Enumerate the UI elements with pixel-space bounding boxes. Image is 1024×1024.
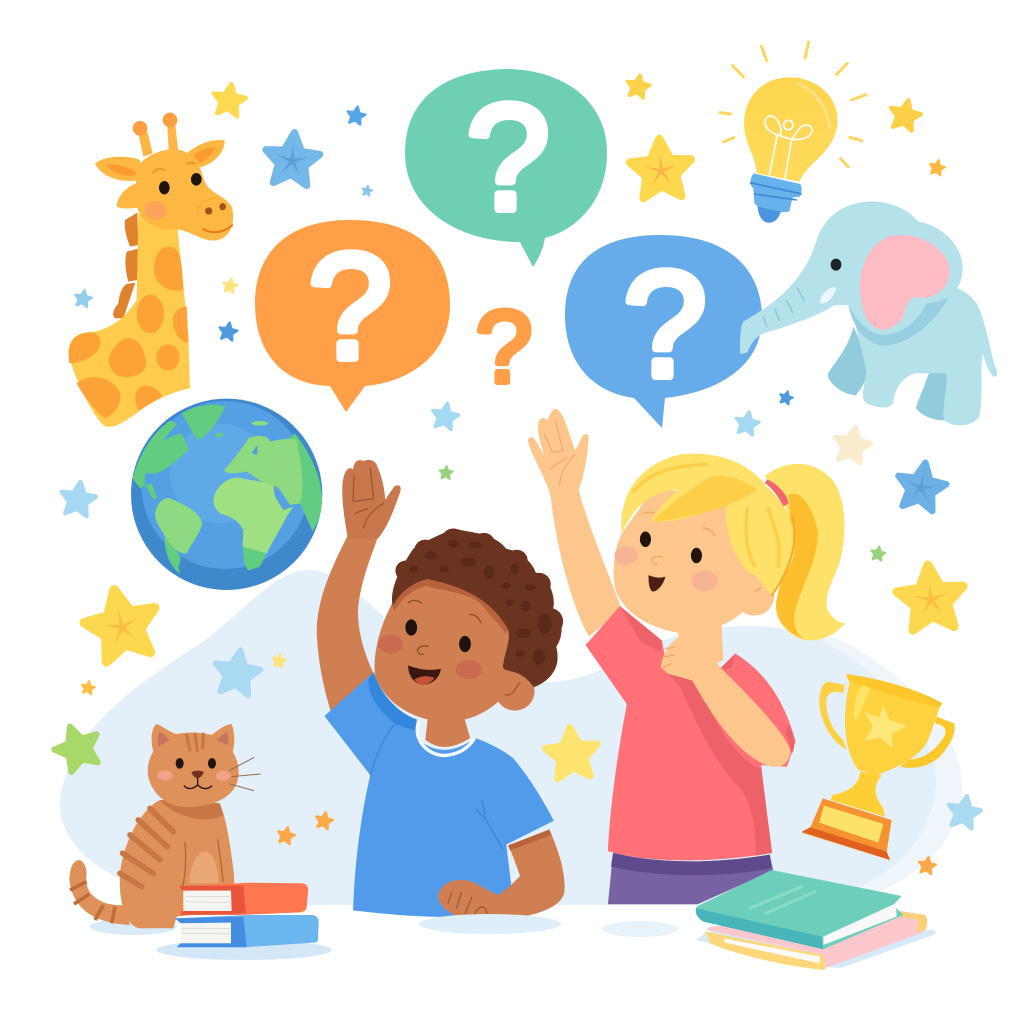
girl shirt: [586, 606, 796, 860]
trophy base: [802, 798, 892, 860]
boy raised arm: [317, 535, 377, 711]
trophy handles: [819, 682, 847, 749]
pink and yellow books: [707, 910, 927, 968]
giraffe head: [136, 149, 233, 241]
cat shadow: [90, 918, 177, 935]
books shadow: [156, 940, 332, 960]
boy mouth: [408, 665, 441, 685]
cat collar shadow: [160, 800, 223, 819]
trophy star: [864, 705, 907, 748]
girl: [528, 408, 846, 904]
giraffe horns: [133, 113, 178, 157]
girl cheeks: [614, 546, 638, 565]
speech bubble: orange: ?: [308, 222, 392, 390]
small orange question mark: ?: [476, 290, 532, 404]
girl eyes, brows, nose: [640, 531, 651, 547]
trophy stem: [831, 772, 885, 817]
boy face: [375, 579, 520, 722]
book: orange: [178, 883, 308, 915]
cat body: [120, 800, 235, 928]
boy eyes and brows: [405, 619, 417, 636]
continents: [133, 405, 323, 574]
giraffe spots: [69, 247, 188, 418]
speech bubble: green: [405, 69, 607, 267]
book: blue: [175, 915, 319, 947]
tusk: [820, 287, 836, 303]
collar shadow: [848, 298, 948, 346]
boy ear: [495, 672, 535, 711]
trunk wrinkles: [763, 288, 804, 327]
girl scrunchie: [765, 479, 789, 506]
girl raised hand: [528, 408, 589, 494]
globe: [131, 399, 323, 590]
body: [853, 287, 997, 425]
eye: [831, 259, 841, 271]
rays: [720, 42, 866, 167]
stars scattered: [49, 73, 983, 875]
girl sleeve cuff: [785, 724, 794, 753]
boy neck: [425, 718, 470, 747]
boy shirt: [324, 672, 554, 917]
giraffe face: [144, 201, 167, 220]
boy hair: [392, 528, 563, 687]
boy raised hand: [342, 460, 401, 539]
cat face: [157, 770, 173, 780]
girl hair front: [621, 454, 795, 596]
giraffe mane: [113, 213, 139, 318]
lightbulb: [720, 42, 866, 223]
girl shirt shading: [620, 606, 772, 856]
cat and books: [69, 724, 332, 960]
giraffe neck and body: [68, 213, 190, 427]
boy: [317, 460, 565, 923]
green book: [696, 870, 903, 949]
far legs: [828, 327, 868, 395]
trophy cup: [845, 680, 941, 775]
bulb glass: [744, 77, 838, 182]
background blob: [60, 570, 962, 905]
elephant: [740, 201, 997, 425]
giraffe: [68, 113, 233, 427]
speech bubble: green: ?: [466, 73, 550, 241]
cat head: [148, 724, 239, 807]
speech bubble: blue: [565, 235, 762, 428]
head and trunk: [740, 201, 963, 354]
speech bubble: blue: ?: [623, 240, 707, 408]
girl arm and hand at chin: [661, 615, 790, 767]
speech bubble: orange: [255, 220, 450, 412]
trophy: [802, 674, 955, 860]
boy collar: [417, 721, 475, 756]
girl raised arm: [550, 490, 622, 637]
cat whiskers: [229, 757, 261, 791]
table shadows: [419, 914, 678, 937]
cat tail: [69, 860, 130, 925]
girl ponytail: [765, 464, 846, 640]
boy cheeks: [378, 635, 403, 654]
girl face: [614, 488, 761, 633]
giraffe ears: [95, 157, 140, 181]
book stack right: [696, 870, 936, 970]
filament: [765, 116, 812, 178]
boy lower arm and hand: [438, 829, 565, 923]
girl mouth: [649, 575, 665, 591]
girl pants: [608, 853, 773, 904]
stack shadow: [696, 930, 936, 968]
girl neck and ear: [675, 623, 723, 674]
base: [750, 173, 802, 223]
ear: [860, 235, 950, 330]
